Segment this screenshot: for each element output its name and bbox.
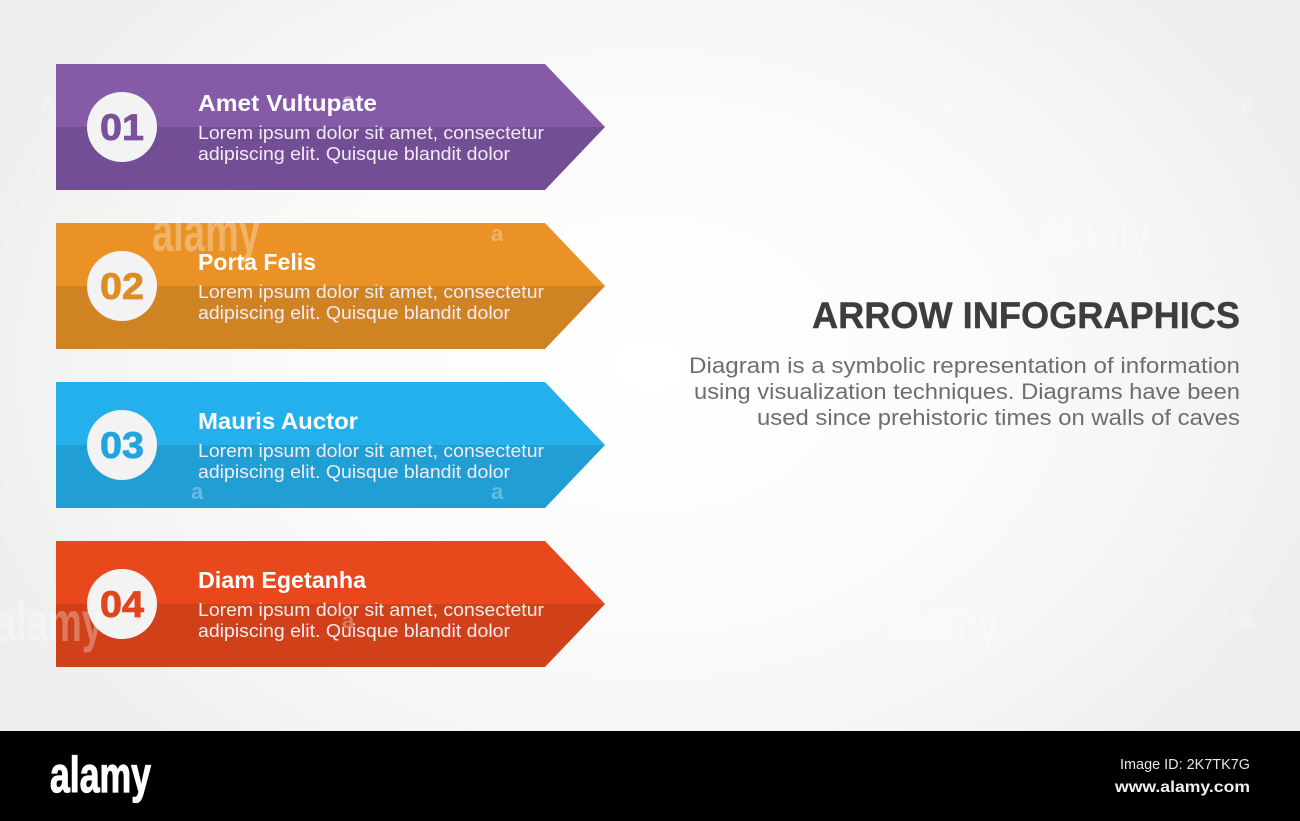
- arrow row 1: Amet Vultupate: Amet Vultupate: [198, 90, 377, 116]
- watermarks: a: [42, 90, 55, 115]
- watermarks: alamy: [891, 590, 999, 653]
- watermarks: alamy: [1043, 200, 1151, 263]
- description text: used since prehistoric times on walls of caves: [757, 405, 1240, 430]
- arrow row 2: Porta Felis: adipiscing elit. Quisque blandit dolor: [198, 303, 510, 323]
- arrow row 1: Amet Vultupate: Lorem ipsum dolor sit amet, consectetur: [198, 123, 544, 143]
- arrow row 3: Mauris Auctor: Mauris Auctor: [198, 408, 358, 434]
- watermarks: a: [642, 90, 655, 115]
- watermarks: [0, 88, 1254, 653]
- arrow row 3: Mauris Auctor: 03: [100, 425, 144, 466]
- footer logo: alamy: alamy: [50, 747, 151, 803]
- watermarks: a: [191, 479, 204, 504]
- footer image id: Image ID: 2K7TK7G: [1120, 756, 1250, 773]
- arrow row 3: Mauris Auctor: Lorem ipsum dolor sit amet, consectetur: [198, 441, 544, 461]
- arrow row 1: Amet Vultupate: 01: [100, 107, 144, 148]
- arrow row 3: Mauris Auctor: [56, 382, 605, 508]
- watermarks: a: [342, 88, 355, 113]
- arrow row 2: Porta Felis: [56, 223, 605, 349]
- watermarks: a: [642, 608, 655, 633]
- arrow row 4: Diam Egetanha: Lorem ipsum dolor sit amet, consectetur: [198, 600, 544, 620]
- description text: [689, 353, 1240, 430]
- watermarks: alamy: [152, 200, 260, 263]
- arrow row 3: Mauris Auctor: adipiscing elit. Quisque blandit dolor: [198, 462, 510, 482]
- watermarks: a: [491, 479, 504, 504]
- arrow row 4: Diam Egetanha: 04: [100, 584, 144, 625]
- description text: Diagram is a symbolic representation of information: [689, 353, 1240, 378]
- arrow row 1: Amet Vultupate: [56, 64, 605, 190]
- watermarks: a: [342, 608, 355, 633]
- arrow row 4: Diam Egetanha: [56, 541, 605, 667]
- watermarks: a: [1241, 90, 1254, 115]
- description text: using visualization techniques. Diagrams have been: [694, 379, 1240, 404]
- arrow row 2: Porta Felis: Porta Felis: [198, 249, 316, 275]
- watermarks: a: [941, 90, 954, 115]
- footer website: www.alamy.com: [1114, 779, 1250, 796]
- title: ARROW INFOGRAPHICS: [812, 295, 1240, 336]
- watermarks: a: [491, 221, 504, 246]
- arrow row 4: Diam Egetanha: adipiscing elit. Quisque blandit dolor: [198, 621, 510, 641]
- arrow row 2: Porta Felis: Lorem ipsum dolor sit amet, consectetur: [198, 282, 544, 302]
- watermarks: a: [1241, 608, 1254, 633]
- arrow row 2: Porta Felis: 02: [100, 266, 144, 307]
- arrow row 1: Amet Vultupate: adipiscing elit. Quisque blandit dolor: [198, 144, 510, 164]
- arrow row 4: Diam Egetanha: Diam Egetanha: [198, 567, 366, 593]
- footer bar: [0, 731, 1300, 821]
